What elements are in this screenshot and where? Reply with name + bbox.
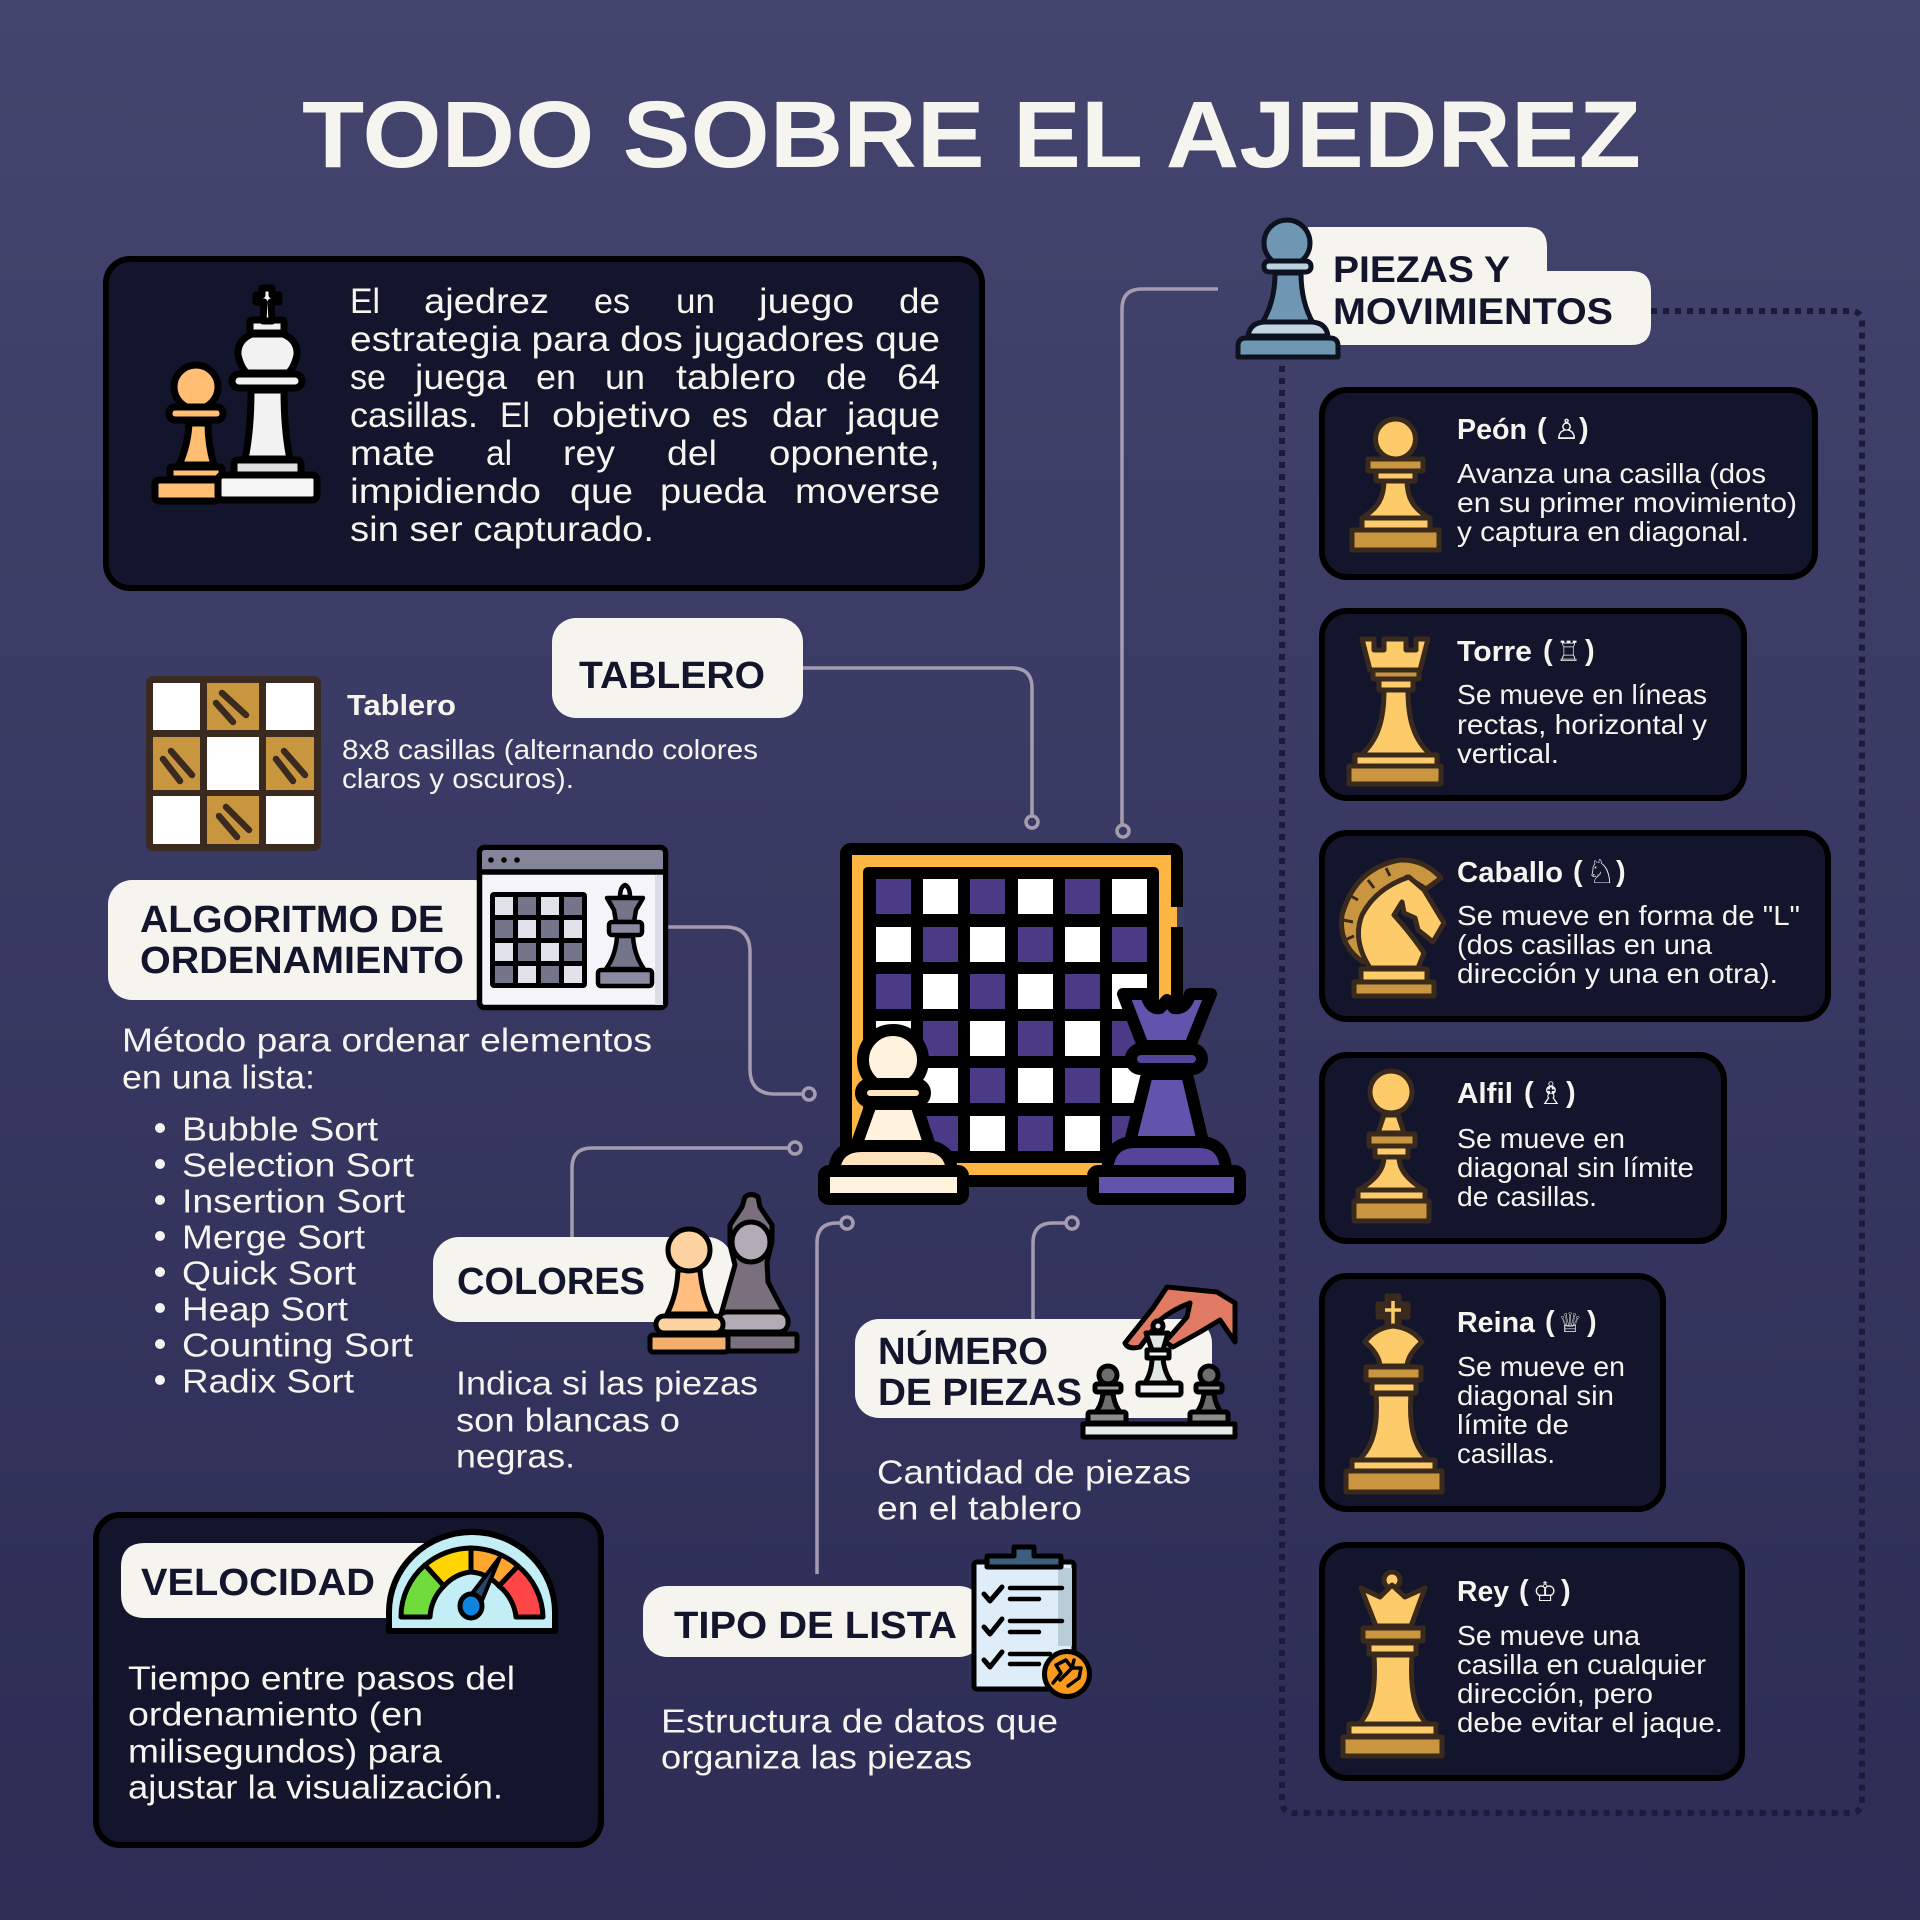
intro text: de (826, 358, 867, 397)
text: colores description: negras. (456, 1438, 575, 1474)
heading: piezas y movimientos: MOVIMIENTOS (1333, 291, 1613, 332)
intro text: es (712, 396, 748, 435)
text: torre (1457, 635, 1707, 769)
icon: gold king piece (1346, 1296, 1442, 1492)
intro text: en (536, 358, 576, 397)
text: rey: Rey (1457, 1576, 1509, 1608)
panel: velocidad (96, 1515, 601, 1845)
text: algorithm description: en una lista: (122, 1058, 315, 1096)
intro text: al (486, 434, 512, 473)
text: reina: diagonal sin (1457, 1380, 1614, 1411)
intro text: casillas. (350, 396, 478, 435)
text: numero de piezas description: en el tablero (877, 1490, 1082, 1526)
intro text: es (594, 282, 630, 321)
text: velocidad description (128, 1660, 515, 1806)
label: numero de piezas (855, 1319, 1212, 1418)
intro text: que (570, 472, 633, 511)
intro text: rey (563, 434, 616, 473)
list: sorting algorithms: Insertion Sort (182, 1182, 405, 1220)
list: sorting algorithms: Selection Sort (182, 1146, 414, 1184)
text: alfil (1457, 1076, 1694, 1212)
text: rey: debe evitar el jaque. (1457, 1707, 1723, 1738)
text: torre: ) (1585, 635, 1595, 667)
label: colores (433, 1237, 733, 1322)
text: velocidad description: ordenamiento (en (128, 1696, 423, 1732)
connector: numero de piezas to board (1033, 1217, 1078, 1319)
intro text: de (899, 282, 940, 321)
text: alfil: ( (1524, 1077, 1534, 1109)
label: algoritmo de ordenamiento (108, 880, 498, 1000)
list: sorting algorithms: Merge Sort (182, 1218, 365, 1256)
text: peon: Peón (1457, 414, 1527, 446)
dotted frame around pieces (1282, 311, 1862, 1813)
panel: peon (1322, 390, 1815, 577)
label: velocidad (121, 1543, 425, 1618)
intro text: del (667, 434, 717, 473)
text: algorithm description (122, 1022, 652, 1096)
white pawn (824, 1030, 963, 1199)
label: tablero: TABLERO (579, 655, 765, 697)
text: tipo de lista description (661, 1702, 1058, 1776)
text: reina: Reina (1457, 1307, 1536, 1339)
heading: piezas y movimientos: PIEZAS Y (1333, 249, 1510, 290)
text: caballo: ) (1616, 856, 1626, 888)
intro text: oponente, (769, 434, 940, 473)
text: alfil: diagonal sin límite (1457, 1152, 1694, 1183)
list: sorting algorithms: Radix Sort (182, 1362, 354, 1400)
icon: blue pawn (1238, 220, 1338, 357)
text: reina (1457, 1306, 1625, 1469)
text: reina: Se mueve en (1457, 1351, 1625, 1382)
text: reina: ) (1587, 1306, 1597, 1338)
label: numero de piezas: NÚMERO (878, 1329, 1048, 1373)
intro text (350, 282, 940, 549)
text: peon: y captura en diagonal. (1457, 516, 1749, 547)
text: peon (1457, 413, 1797, 547)
icon: central board with pawn and rook (824, 849, 1240, 1199)
label: velocidad: VELOCIDAD (141, 1562, 375, 1604)
label: tablero (552, 618, 803, 718)
icon: gold knight (1341, 860, 1444, 996)
text: tablero description: 8x8 casillas (alternando colores (342, 734, 758, 765)
text: rey: ( (1519, 1575, 1529, 1607)
icon: gold rook (1349, 639, 1441, 784)
text: colores description: Indica si las piezas (456, 1364, 758, 1402)
text: rey: ♔ (1533, 1577, 1557, 1608)
icon: gold queen piece (1343, 1572, 1442, 1756)
panel: reina (1322, 1276, 1663, 1509)
text: velocidad description: milisegundos) para (128, 1732, 443, 1770)
icon: orange pawn and gray bishop (650, 1194, 797, 1352)
connector: colores to board (572, 1142, 801, 1237)
text: reina: límite de (1457, 1409, 1569, 1440)
panel: rey (1322, 1545, 1742, 1778)
text: caballo: Se mueve en forma de "L" (1457, 900, 1800, 931)
icon: speedometer (389, 1532, 555, 1631)
icon: gold bishop (1354, 1071, 1429, 1221)
intro text: El (350, 282, 380, 321)
panel: caballo (1322, 833, 1828, 1019)
text: tablero description (342, 690, 758, 794)
intro text: ajedrez (424, 282, 549, 321)
list: sorting algorithms: Bubble Sort (182, 1110, 378, 1148)
title: TODO SOBRE EL AJEDREZ (302, 82, 1641, 188)
board (846, 849, 1184, 1181)
text: colores description: son blancas o (456, 1402, 680, 1438)
text: velocidad description: ajustar la visualización. (128, 1768, 503, 1806)
text: reina: casillas. (1457, 1438, 1555, 1469)
text: torre: Torre (1457, 636, 1532, 668)
icon: pawn and king (155, 288, 317, 501)
text: alfil: ♗ (1537, 1076, 1565, 1112)
label: tipo de lista (643, 1586, 983, 1657)
intro text: mate (350, 434, 435, 473)
label: colores: COLORES (457, 1261, 645, 1303)
label: numero de piezas: DE PIEZAS (878, 1372, 1082, 1414)
text: peon: Avanza una casilla (dos (1457, 458, 1766, 489)
icon: algorithm window (479, 848, 666, 1008)
text: caballo: ( (1573, 856, 1583, 888)
intro text: juega (414, 358, 508, 397)
icon: gold pawn (1352, 419, 1439, 550)
intro text: estrategia para dos jugadores que (350, 320, 940, 359)
intro text: 64 (897, 358, 940, 397)
label: algoritmo de ordenamiento: ORDENAMIENTO (140, 940, 464, 982)
text: caballo: ♘ (1586, 852, 1616, 891)
panel: torre (1322, 611, 1744, 798)
intro text: jaque (846, 396, 940, 435)
text: alfil: de casillas. (1457, 1181, 1597, 1212)
text: alfil: Alfil (1457, 1078, 1513, 1110)
text: reina: ( (1545, 1306, 1555, 1338)
intro text: moverse (795, 472, 940, 511)
text: algorithm description: Método para ordenar elementos (122, 1022, 652, 1058)
text: tablero description: claros y oscuros). (342, 763, 574, 794)
text: torre: ( (1543, 635, 1553, 667)
intro text: un (676, 282, 715, 321)
intro text: impidiendo (350, 472, 541, 511)
text: rey: ) (1561, 1575, 1571, 1607)
intro text: un (605, 358, 645, 397)
list: sorting algorithms: Quick Sort (182, 1254, 356, 1292)
text: caballo: Caballo (1457, 857, 1563, 889)
connector: tipo de lista to board (817, 1217, 853, 1574)
text: caballo: dirección y una en otra). (1457, 958, 1778, 989)
icon: clipboard (974, 1547, 1090, 1696)
connector: piezas to board (1117, 289, 1218, 837)
intro text: dar (772, 396, 827, 435)
text: rey (1457, 1575, 1723, 1738)
icon: board tile (146, 676, 321, 851)
text: peon: ) (1579, 413, 1589, 445)
intro text: El (500, 396, 530, 435)
list: sorting algorithms (155, 1110, 414, 1400)
text: peon: ( (1537, 413, 1547, 445)
icon: hand moving piece (1083, 1287, 1235, 1437)
intro text: objetivo (552, 396, 691, 435)
text: velocidad description: Tiempo entre pasos del (128, 1660, 515, 1696)
connector: algoritmo to board (668, 927, 815, 1100)
intro text: juego (758, 282, 854, 321)
label: algoritmo de ordenamiento: ALGORITMO DE (140, 899, 444, 941)
text: colores description (456, 1364, 758, 1474)
intro text: sin ser capturado. (350, 510, 654, 549)
text: rey: Se mueve una (1457, 1620, 1641, 1651)
text: rey: dirección, pero (1457, 1678, 1653, 1709)
text: torre: rectas, horizontal y (1457, 709, 1707, 740)
text: peon: ♙ (1554, 413, 1579, 446)
text: caballo: (dos casillas en una (1457, 929, 1713, 960)
intro text: se (350, 358, 386, 397)
text: numero de piezas description (877, 1454, 1191, 1526)
heading: piezas y movimientos (1300, 227, 1651, 345)
panel: alfil (1322, 1055, 1724, 1241)
list: sorting algorithms: Counting Sort (182, 1326, 413, 1364)
text: numero de piezas description: Cantidad de piezas (877, 1454, 1191, 1490)
text: tablero description: Tablero (347, 690, 456, 722)
text: alfil: ) (1566, 1077, 1576, 1109)
text: peon: en su primer movimiento) (1457, 487, 1797, 518)
purple rook (1093, 994, 1240, 1199)
panel: introduction (106, 259, 982, 588)
intro text: tablero (676, 358, 796, 397)
text: torre: ♖ (1556, 635, 1581, 668)
intro text: pueda (660, 472, 767, 511)
label: tipo de lista: TIPO DE LISTA (674, 1605, 957, 1647)
text: reina: ♕ (1558, 1308, 1582, 1339)
list: sorting algorithms: Heap Sort (182, 1290, 348, 1328)
connector: tablero to board (803, 668, 1038, 828)
text: tipo de lista description: organiza las piezas (661, 1738, 972, 1776)
text: tipo de lista description: Estructura de datos que (661, 1702, 1058, 1740)
text: torre: vertical. (1457, 738, 1559, 769)
text: alfil: Se mueve en (1457, 1123, 1625, 1154)
text: caballo (1457, 852, 1800, 989)
text: torre: Se mueve en líneas (1457, 679, 1707, 710)
text: rey: casilla en cualquier (1457, 1649, 1706, 1680)
